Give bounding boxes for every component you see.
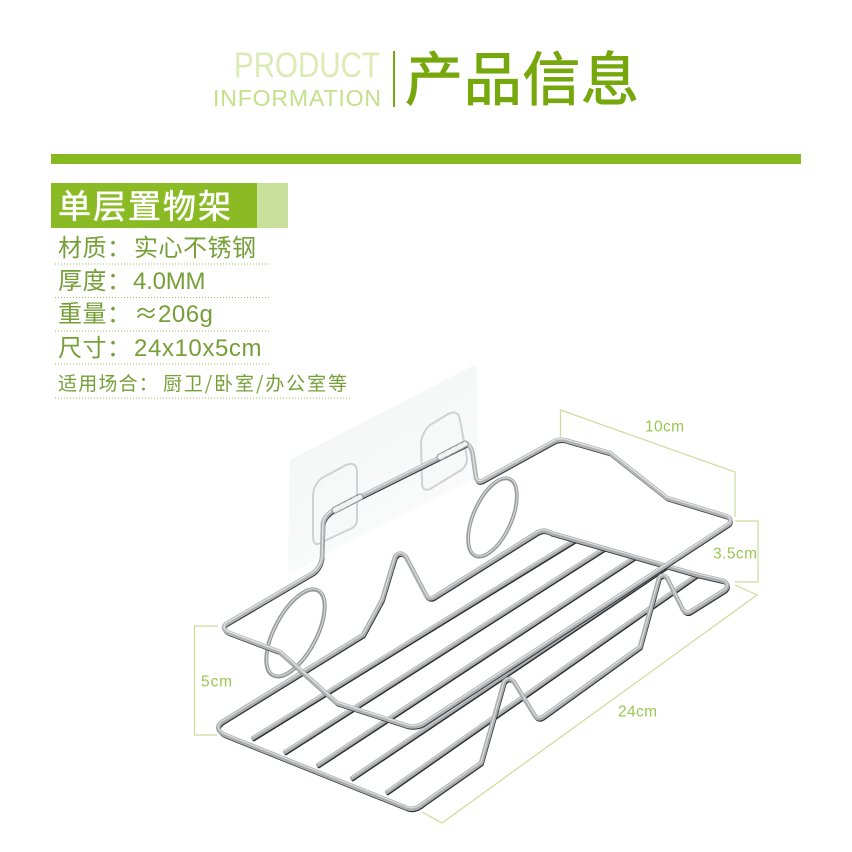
spec: size: 尺寸： [58,328,132,363]
title: english first line: PRODUCT [234,46,380,85]
spec: material: 实心不锈钢 [134,228,256,263]
dimension: 24cm [422,585,757,823]
spec: weight: 重量： [58,294,132,329]
spec: thickness: 厚度： [58,261,132,296]
rack: cross wires [253,539,698,794]
green divider bar [51,154,801,164]
title: english second line: INFORMATION [213,85,381,111]
title [213,33,639,117]
rack: lower tray frame [218,530,728,810]
spec: thickness [55,261,270,298]
dimension: 3.5cm [713,521,758,582]
rack: back rings [254,471,527,685]
rack: upper rim [224,439,731,728]
dimension: 10cm [560,410,735,517]
dimension: 24cm: 24cm [618,704,657,720]
spec: usage: 适用场合： [58,369,159,396]
adhesive plate [288,365,478,574]
spec: usage [55,369,350,398]
spec: size: 24x10x5cm [134,335,262,362]
wire rack [218,439,731,810]
spec: material [55,228,270,264]
rack: hook clips [335,444,465,510]
spec: usage: 厨卫/卧室/办公室等 [163,369,347,396]
panel: product specs [51,180,350,398]
spec: thickness: 4.0MM [133,268,206,295]
spec: size [55,328,270,364]
spec: material: 材质： [58,228,132,263]
title: divider [393,51,395,107]
spec: weight: ≈ [134,294,158,329]
spec heading band: 单层置物架 [58,180,231,228]
suction hook right [421,412,467,490]
spec: weight [55,294,270,331]
dimension: 3.5cm: 3.5cm [713,546,757,562]
suction hook left [313,464,357,544]
dimension: 5cm [194,626,232,735]
spec: weight: 206g [158,301,213,328]
title: chinese heading: 产品信息 [405,33,639,117]
dimension: 10cm: 10cm [645,418,684,436]
dimension: 5cm: 5cm [201,674,232,690]
